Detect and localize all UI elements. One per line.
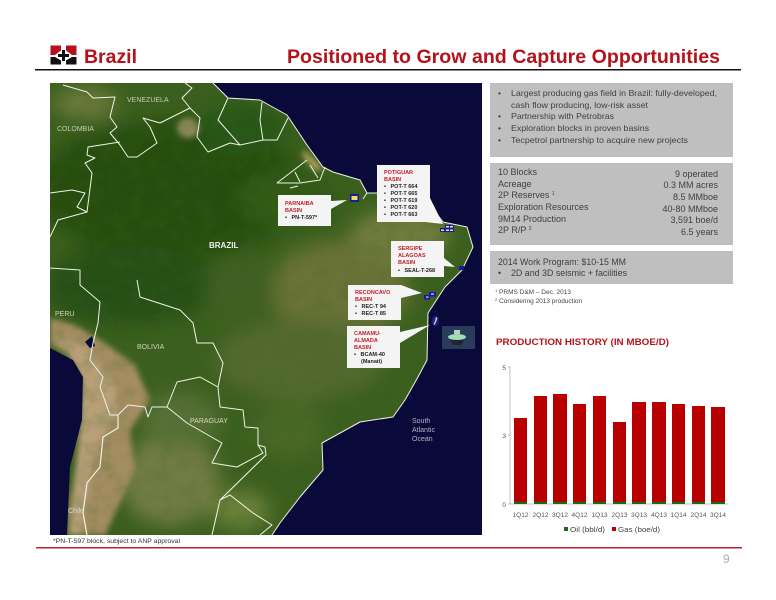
x axis labels: 2Q14 <box>691 512 707 519</box>
panel: work program <box>490 251 733 284</box>
callout: Potiguar Basin: BASIN <box>384 177 401 183</box>
callout: Potiguar Basin: POTIGUAR <box>384 170 413 176</box>
map land <box>35 83 482 535</box>
x axis labels: 3Q12 <box>552 512 568 519</box>
panel: key facts: 3,591 boe/d <box>670 215 718 225</box>
footnotes: PRMS D&M – Dec. 2013 <box>497 289 571 296</box>
callout: Reconcavo Basin: • REC-T 94 <box>355 304 387 310</box>
panel: key facts: 9 operated <box>675 169 718 179</box>
map label: South Atlantic Ocean: South <box>412 418 430 425</box>
map label: Colombia: COLOMBIA <box>57 126 94 133</box>
legend <box>564 525 661 534</box>
callout: Potiguar Basin: • POT-T 664 <box>384 184 418 190</box>
panel: highlights: Tecpetrol partnership to acquire new projects <box>511 135 688 145</box>
x axis labels: 1Q13 <box>592 512 608 519</box>
header: slide title: Positioned to Grow and Capture Opportunities <box>287 47 720 68</box>
icon: Camamu block <box>432 316 439 326</box>
bar chart: production history <box>502 365 728 534</box>
callout: Parnaiba Basin: BASIN <box>285 208 302 214</box>
icon: Reconcavo blocks <box>424 292 436 300</box>
callout: Camamu-Almada Basin: ALMADA <box>354 338 378 344</box>
callout: Potiguar Basin: • POT-T 619 <box>384 198 417 204</box>
callout: Camamu-Almada Basin: CAMAMU- <box>354 331 381 337</box>
panel: key facts <box>490 163 733 245</box>
callout: Reconcavo Basin: BASIN <box>355 297 372 303</box>
callout: Potiguar Basin: • POT-T 665 <box>384 191 417 197</box>
panel: highlights: • <box>498 123 501 133</box>
footnotes <box>495 288 583 305</box>
map label: Peru: PERU <box>55 311 74 318</box>
callout: Sergipe Alagoas Basin <box>391 241 455 277</box>
panel: highlights: Largest producing gas field in Brazil: fully-developed, <box>511 88 717 98</box>
callout: Camamu-Almada Basin <box>347 325 430 368</box>
callout: Sergipe Alagoas Basin: BASIN <box>398 260 415 266</box>
icon: Potiguar blocks <box>440 225 454 232</box>
callout: Parnaiba Basin: PARNAIBA <box>285 201 314 207</box>
y axis labels: 5 <box>502 365 506 372</box>
map label: Chile: Chile <box>68 508 84 515</box>
oil bars <box>514 502 725 504</box>
header: country heading: Brazil <box>84 47 137 68</box>
panel: highlights: Exploration blocks in proven basins <box>511 123 649 133</box>
callout: Potiguar Basin: • POT-T 663 <box>384 212 417 218</box>
callout: Sergipe Alagoas Basin: ALAGOAS <box>398 253 426 259</box>
y axis labels <box>502 365 506 509</box>
icon: Sergipe block <box>459 266 464 270</box>
panel: key facts: 2 <box>529 226 532 232</box>
callout: Potiguar Basin: • POT-T 620 <box>384 205 417 211</box>
map label: South Atlantic Ocean: Ocean <box>412 436 433 443</box>
map footnote: *PN-T-597 block, subject to ANP approval <box>53 538 181 545</box>
panel: key facts: 8.5 MMboe <box>673 192 718 202</box>
chart heading: PRODUCTION HISTORY (IN MBOE/D) <box>496 337 669 348</box>
panel: key facts: Acreage <box>498 179 532 189</box>
map label: South Atlantic Ocean <box>412 418 435 443</box>
legend: Oil (bbl/d) <box>570 525 606 534</box>
map label: Brazil: BRAZIL <box>209 241 238 250</box>
footnotes: 1 <box>495 288 498 293</box>
legend: Gas (boe/d) <box>618 525 661 534</box>
callout: Camamu-Almada Basin: (Manati) <box>361 359 382 365</box>
panel: key facts: 9M14 Production <box>498 214 566 224</box>
map label: Paraguay: PARAGUAY <box>190 418 228 425</box>
x axis labels: 3Q14 <box>710 512 726 519</box>
map label: Bolivia: BOLIVIA <box>137 344 165 351</box>
header: logo <box>50 45 77 65</box>
callout: Camamu-Almada Basin: • BCAM-40 <box>354 352 385 358</box>
map label: Venezuela: VENEZUELA <box>127 97 169 104</box>
x axis labels: 1Q12 <box>513 512 529 519</box>
x axis labels: 1Q14 <box>671 512 687 519</box>
footnotes: 2 <box>495 297 498 302</box>
callout: Reconcavo Basin: RECONCAVO <box>355 290 391 296</box>
y axis labels: 3 <box>502 433 506 440</box>
panel: work program: 2D and 3D seismic + facilities <box>511 268 627 278</box>
panel: highlights: Partnership with Petrobras <box>511 111 614 121</box>
x axis labels: 2Q12 <box>533 512 549 519</box>
panel: highlights <box>490 83 733 157</box>
panel: key facts: 2P Reserves <box>498 190 549 200</box>
panel: key facts: 0.3 MM acres <box>663 180 718 190</box>
panel: work program: 2014 Work Program: $10-15 MM <box>498 257 626 267</box>
footnotes: Considering 2013 production <box>497 298 583 305</box>
x axis labels: 2Q13 <box>612 512 628 519</box>
gas bars <box>514 394 725 504</box>
panel: highlights: • <box>498 111 501 121</box>
callout: Potiguar Basin <box>377 165 443 224</box>
panel: highlights: • <box>498 135 501 145</box>
panel: key facts: 40-80 MMboe <box>662 204 718 214</box>
panel: key facts: 2P R/P <box>498 225 526 235</box>
panel: highlights: • <box>498 88 501 98</box>
map national borders <box>50 83 473 535</box>
x axis labels <box>513 512 726 519</box>
panel: work program: • <box>498 268 501 278</box>
panel: key facts: 6.5 years <box>681 227 718 237</box>
x axis labels: 4Q13 <box>651 512 667 519</box>
map ocean <box>50 83 482 535</box>
panel: highlights: cash flow producing, low-risk asset <box>511 100 649 110</box>
callout: Reconcavo Basin: • REC-T 85 <box>355 311 386 317</box>
panel: key facts: 1 <box>552 191 555 197</box>
icon: Parnaiba block <box>350 194 359 202</box>
x axis labels: 3Q13 <box>631 512 647 519</box>
panel: key facts: 10 Blocks <box>498 167 538 177</box>
callout: Camamu-Almada Basin: BASIN <box>354 345 371 351</box>
y axis labels: 0 <box>502 502 506 509</box>
callout: Parnaiba Basin <box>278 195 347 226</box>
callout: Parnaiba Basin: • PN-T-597* <box>285 215 318 221</box>
callout: Sergipe Alagoas Basin: SERGIPE <box>398 246 423 252</box>
panel: key facts: Exploration Resources <box>498 202 589 212</box>
callout: Reconcavo Basin <box>348 285 422 320</box>
x axis labels: 4Q12 <box>572 512 588 519</box>
callout: Sergipe Alagoas Basin: • SEAL-T-268 <box>398 268 435 274</box>
panel: satellite map of South America <box>35 83 482 535</box>
map label: South Atlantic Ocean: Atlantic <box>412 427 435 434</box>
photo: offshore platform <box>442 326 475 349</box>
page number: 9 <box>723 552 730 566</box>
